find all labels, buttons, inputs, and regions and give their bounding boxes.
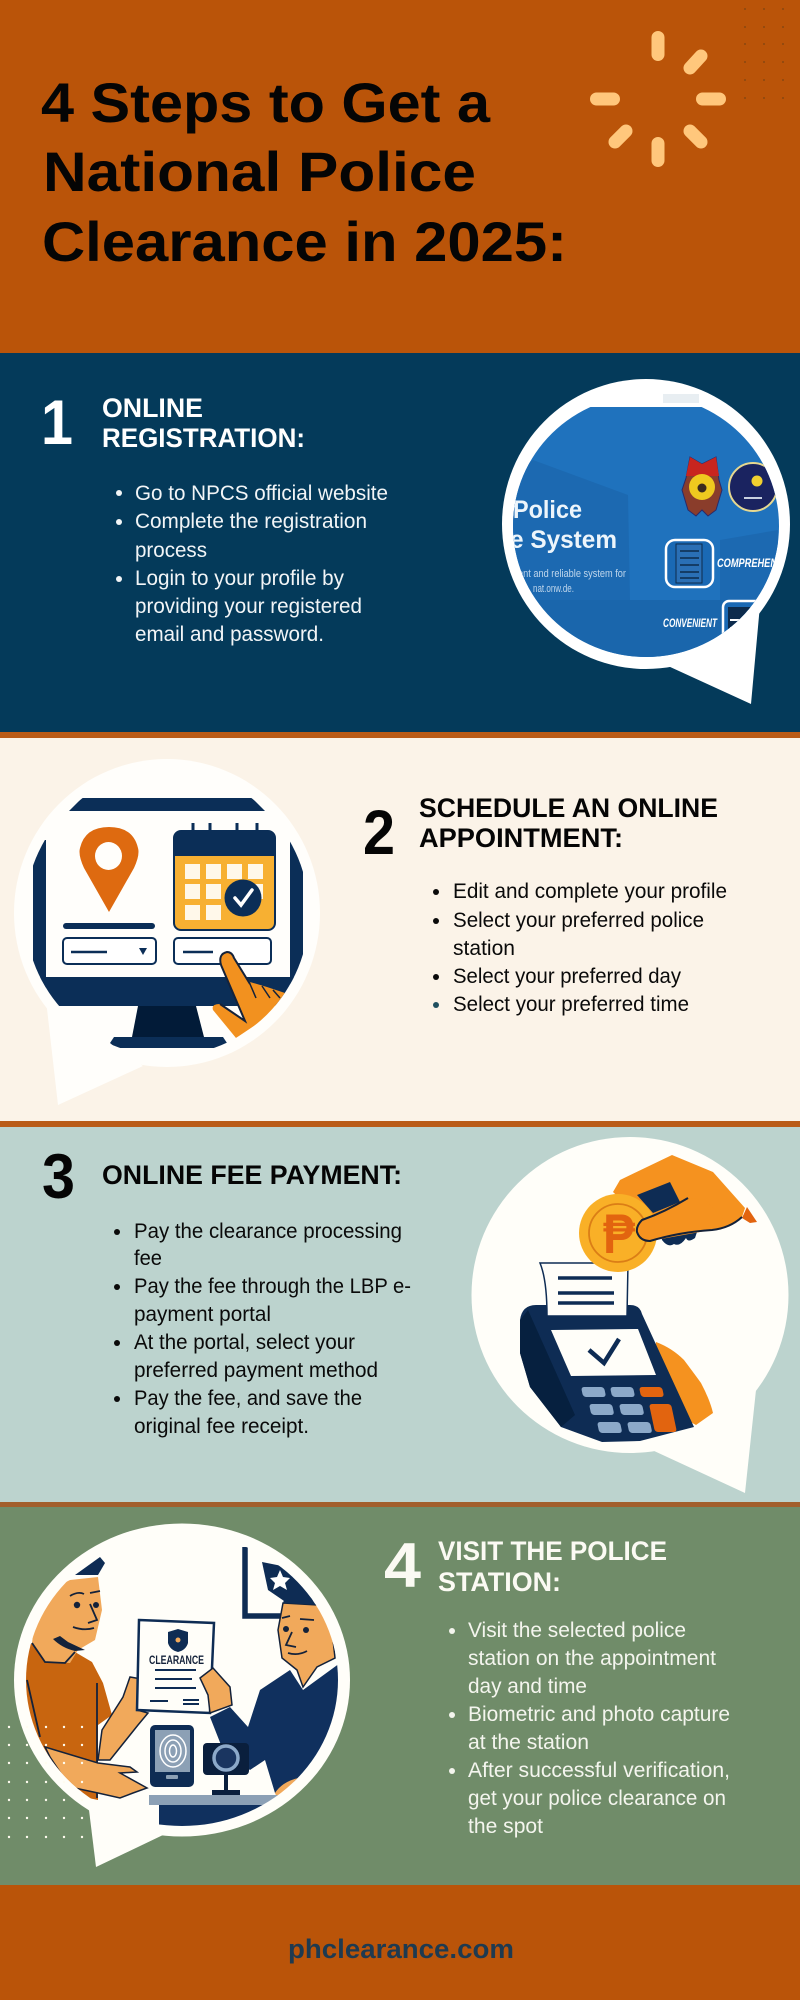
desk: [149, 1795, 278, 1826]
heading: schedule an online appointment: SCHEDULE AN ONLINE: [419, 793, 718, 823]
icon: pointing hand: [213, 952, 285, 1038]
document title: CLEARANCE: [149, 1653, 204, 1667]
receipt: [540, 1263, 628, 1316]
right hand on document: [200, 1668, 232, 1713]
bullet list step 1: Login to your profile by: [135, 567, 344, 590]
footer band: [0, 1885, 800, 2000]
icon: checklist: [666, 540, 713, 587]
bullet list step 4: station on the appointment: [468, 1647, 716, 1670]
bullet list step 4: After successful verification,: [468, 1759, 730, 1782]
bullet list step 4: get your police clearance on: [468, 1787, 726, 1810]
right man: [210, 1588, 340, 1800]
heading: visit the police station: [438, 1536, 667, 1597]
terminal body: [520, 1305, 694, 1442]
divider stripe: [0, 1121, 800, 1127]
bullet list step 4: Biometric and photo capture: [468, 1703, 730, 1726]
divider stripe: [0, 1502, 800, 1507]
camera: [203, 1743, 249, 1795]
title: 4 Steps to Get a: [41, 71, 491, 134]
bullet list step 2: Edit and complete your profile: [453, 880, 727, 903]
bullet list step 1: Complete the registration: [135, 510, 367, 533]
peso coin: [579, 1194, 657, 1272]
bullet list step 4: the spot: [468, 1815, 543, 1838]
speech bubble with monitor illustration: [14, 759, 320, 1105]
input field: [174, 938, 271, 964]
bullet list step 2: Select your preferred police: [453, 909, 704, 932]
bullet list step 2: [433, 880, 727, 1016]
bubble tail: [668, 605, 760, 704]
left man: [26, 1557, 150, 1800]
heading: online registration: ONLINE: [102, 393, 203, 423]
panel: step 2 schedule appointment: [0, 738, 800, 1121]
heading: schedule an online appointment: [419, 793, 718, 853]
heading: online registration: REGISTRATION:: [102, 423, 305, 453]
header band: [0, 0, 800, 353]
bullet list step 3: preferred payment method: [134, 1359, 378, 1382]
hand holding terminal: [650, 1342, 713, 1425]
panel: step 1 online registration: [0, 353, 800, 733]
step number 4: 4: [384, 1531, 421, 1601]
footer website: phclearance.com: [288, 1934, 514, 1964]
bullet list step 1: email and password.: [135, 623, 324, 646]
dot pattern: [8, 1726, 83, 1838]
bullet list step 3: fee: [134, 1247, 162, 1270]
dropdown field: [63, 938, 156, 964]
screen subtext: ent and reliable system for: [518, 568, 626, 580]
bullet list step 1: process: [135, 539, 207, 562]
bullet list step 4: at the station: [468, 1731, 589, 1754]
logo: round seal: [729, 463, 777, 511]
logo: police badge: [682, 457, 722, 516]
label comprehensive: COMPREHEN: [717, 556, 777, 570]
bullet list step 3: Pay the fee, and save the: [134, 1387, 362, 1410]
screen subtext: nat.onw.de.: [533, 583, 574, 595]
icon: location pin: [80, 827, 138, 912]
icon: sun rays: [596, 38, 720, 160]
heading: schedule an online appointment: APPOINTMENT:: [419, 823, 623, 853]
bullet list step 4: Visit the selected police: [468, 1619, 686, 1642]
bullet list step 3: Pay the fee through the LBP e-: [134, 1275, 411, 1298]
dot pattern: [744, 8, 784, 99]
label convenient: CONVENIENT: [663, 616, 718, 630]
heading: online fee payment: ONLINE FEE PAYMENT:: [102, 1160, 402, 1190]
step number 2: 2: [363, 798, 395, 868]
wall frame with shield: [245, 1547, 320, 1616]
screen heading: [513, 500, 616, 553]
top hand: [613, 1155, 757, 1245]
bullet list step 4: day and time: [468, 1675, 587, 1698]
bullet list step 2: Select your preferred day: [453, 965, 681, 988]
bullet list step 4: [449, 1619, 730, 1838]
bullet list step 3: original fee receipt.: [134, 1415, 309, 1438]
bullet list step 2: station: [453, 937, 515, 960]
fingerprint scanner: [150, 1725, 194, 1787]
bullet list step 3: Pay the clearance processing: [134, 1220, 402, 1243]
title: [41, 71, 567, 273]
heading: visit the police station: STATION:: [438, 1567, 561, 1597]
bullet list step 3: At the portal, select your: [134, 1331, 355, 1354]
thumb: [638, 1202, 730, 1240]
monitor illustration: [33, 798, 303, 1048]
bullet list step 1: [116, 482, 388, 646]
bullet list step 3: payment portal: [134, 1303, 271, 1326]
panel: step 3 online fee payment: [0, 1127, 800, 1502]
screen heading: Police: [513, 496, 582, 524]
heading: online registration: [102, 393, 305, 453]
step number 3: 3: [42, 1142, 75, 1212]
divider stripe: [0, 732, 800, 738]
clearance document: [137, 1620, 214, 1713]
speech bubble with payment terminal illustration: [472, 1137, 788, 1493]
screen heading: e System: [510, 526, 617, 554]
clearance handover illustration: [10, 1547, 340, 1835]
screen subtext: [521, 569, 626, 592]
bullet list step 1: Go to NPCS official website: [135, 482, 388, 505]
bullet list step 1: providing your registered: [135, 595, 362, 618]
icon: calendar: [722, 600, 756, 634]
speech bubble with website screenshot: [500, 379, 800, 704]
speech bubble with clearance illustration: [10, 1524, 350, 1867]
peso coin: ₱: [603, 1202, 636, 1265]
title: Clearance in 2025:: [42, 210, 567, 273]
icon: calendar with check: [174, 823, 275, 930]
payment terminal illustration: [520, 1155, 757, 1442]
title: National Police: [43, 140, 476, 203]
panel: step 4 visit the police station: [0, 1507, 800, 1885]
step number 1: 1: [41, 388, 73, 458]
bullet list step 3: [114, 1220, 411, 1438]
bullet list step 2: Select your preferred time: [453, 993, 689, 1016]
website screenshot: [513, 407, 779, 657]
heading: visit the police station: VISIT THE POLICE: [438, 1536, 667, 1566]
